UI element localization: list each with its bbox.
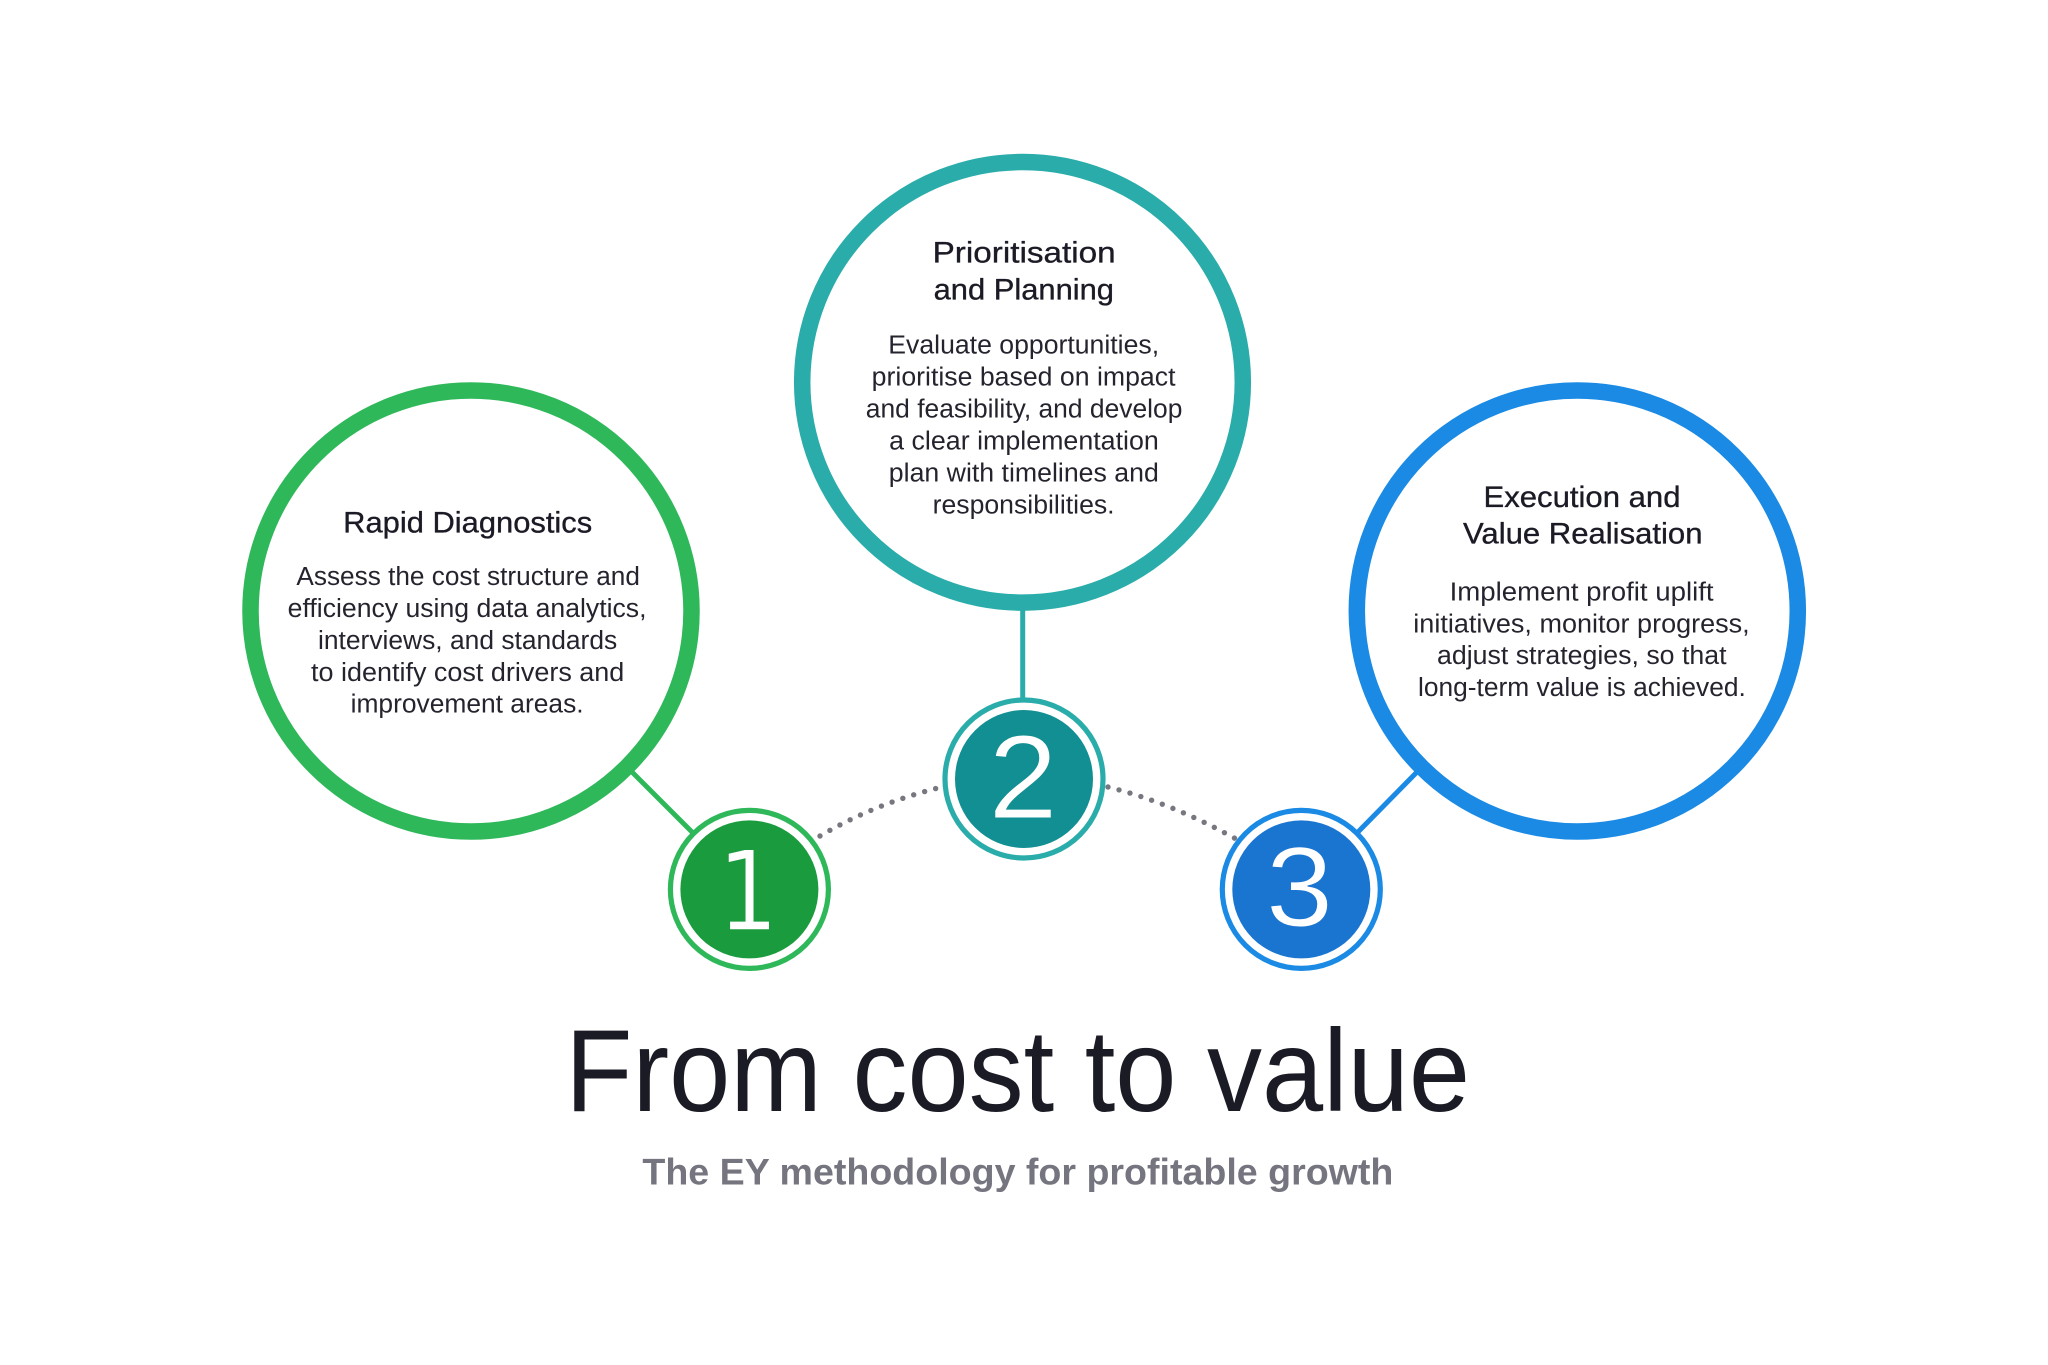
body text: step 2: a clear implementation: [889, 428, 1159, 456]
body text: step 3: initiatives, monitor progress,: [1413, 610, 1750, 638]
body text: step 1: [288, 563, 646, 719]
body text: step 3: adjust strategies, so that: [1437, 642, 1726, 670]
title: From cost to value: [565, 1005, 1470, 1136]
body text: step 3: long-term value is achieved.: [1418, 674, 1746, 702]
body text: step 1: efficiency using data analytics,: [288, 595, 646, 623]
dotted arc: step 1 to step 2: [820, 787, 942, 836]
body text: step 3: Implement profit uplift: [1450, 578, 1714, 606]
connector: circle 2 to badge 2: [1020, 606, 1025, 700]
ring: teal: [802, 162, 1243, 603]
body text: step 2: prioritise based on impact: [872, 364, 1176, 392]
badge: number 2: [945, 700, 1103, 858]
badge: number 3: 3: [1266, 824, 1333, 950]
connector: circle 1 to badge 1: [630, 770, 693, 833]
panel: Rapid Diagnostics: [250, 390, 692, 832]
body text: step 1: interviews, and standards: [318, 627, 617, 655]
heading: Execution and Value Realisation: Value Realisation: [1463, 518, 1702, 551]
subtitle: The EY methodology for profitable growth: [642, 1151, 1393, 1192]
panel: Prioritisation and Planning: [802, 162, 1243, 603]
badge: number 2: 2: [988, 711, 1058, 844]
body text: step 3: [1413, 578, 1750, 702]
badge: number 1: 1: [718, 828, 778, 957]
heading: Rapid Diagnostics: Rapid Diagnostics: [343, 507, 592, 540]
body text: step 1: Assess the cost structure and: [296, 563, 640, 591]
badge: number 1: [670, 810, 828, 968]
body text: step 1: improvement areas.: [351, 691, 584, 719]
badge: number 3: [1222, 810, 1380, 968]
connector: circle 3 to badge 3: [1357, 771, 1418, 833]
body text: step 2: responsibilities.: [933, 491, 1115, 519]
dotted arc: step 2 to step 3: [1108, 787, 1236, 839]
body text: step 2: and feasibility, and develop: [866, 396, 1182, 424]
ring: green: [250, 390, 692, 832]
panel: Execution and Value Realisation: [1357, 390, 1798, 832]
heading: Execution and Value Realisation: [1463, 481, 1702, 551]
body text: step 2: [866, 331, 1182, 519]
heading: Prioritisation and Planning: [933, 237, 1116, 306]
heading: Execution and Value Realisation: Execution and: [1484, 481, 1680, 514]
body text: step 2: plan with timelines and: [889, 460, 1159, 488]
ring: blue: [1357, 390, 1798, 832]
body text: step 1: to identify cost drivers and: [311, 659, 624, 687]
heading: Prioritisation and Planning: and Planning: [934, 274, 1114, 306]
heading: Prioritisation and Planning: Prioritisation: [933, 237, 1116, 270]
body text: step 2: Evaluate opportunities,: [888, 331, 1159, 359]
